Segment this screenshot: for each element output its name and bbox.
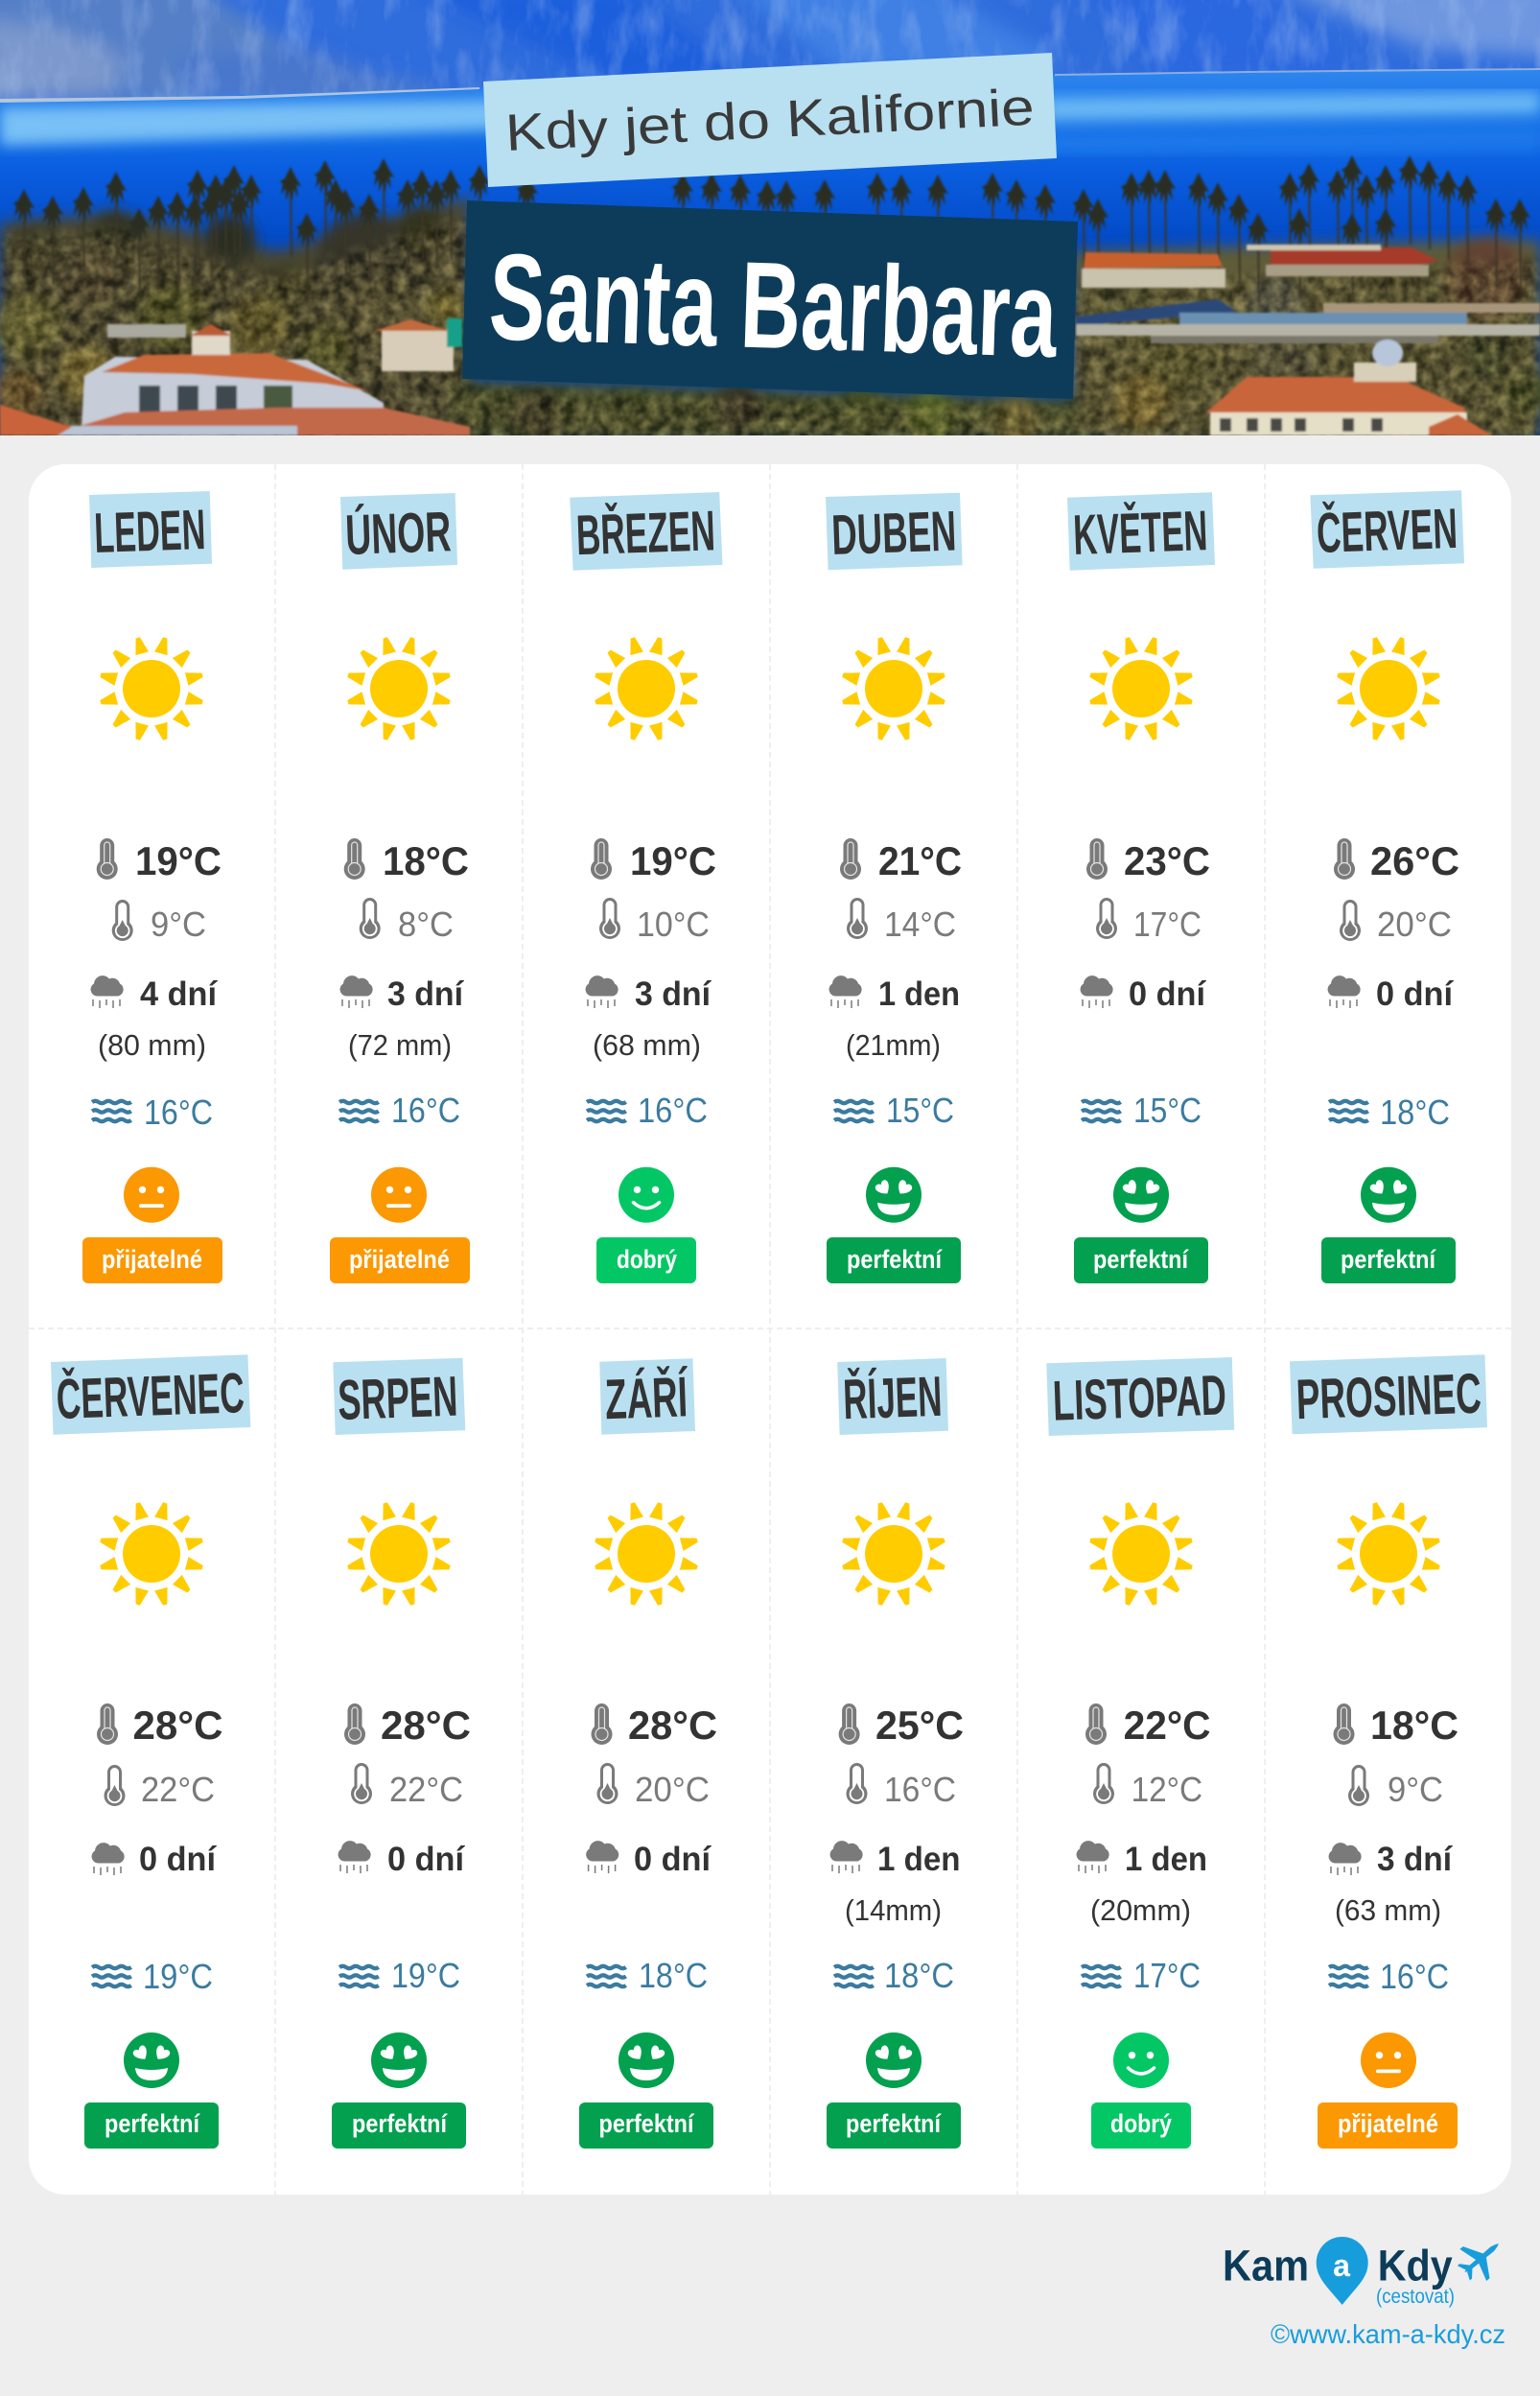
icon: water waves (834, 1966, 874, 1986)
rainfall: (80 mm) (98, 1028, 206, 1062)
rain days: 3 dní (387, 975, 464, 1013)
month label: ŘÍJEN (837, 1358, 948, 1435)
icon: sun (346, 1501, 452, 1607)
rating badge: přijatelné (349, 1245, 450, 1274)
rating badge: přijatelné (1338, 2109, 1438, 2138)
icon: thermometer low (112, 900, 133, 941)
icon: perfect face (866, 2032, 922, 2088)
rating badge (596, 1237, 696, 1283)
icon: water waves (834, 1101, 874, 1121)
month label: BŘEZEN: BŘEZEN (575, 498, 716, 567)
max temperature: 22°C (1124, 1703, 1211, 1748)
icon: perfect face (866, 1167, 922, 1223)
icon: sun (841, 1501, 946, 1607)
icon: thermometer low (1340, 900, 1361, 941)
rain days: 0 dní (1129, 975, 1206, 1013)
icon: sun (346, 636, 452, 741)
icon: perfect face (618, 2032, 674, 2088)
rain days: 0 dní (1376, 975, 1454, 1013)
panel: ŘÍJEN (827, 1358, 964, 2149)
month label: DUBEN (826, 493, 963, 570)
icon: thermometer low (599, 898, 620, 939)
rating badge: perfektní (1341, 1245, 1436, 1274)
rating badge: perfektní (1093, 1245, 1189, 1274)
rating badge: perfektní (847, 1245, 943, 1274)
icon: thermometer low (351, 1763, 372, 1804)
month label: ČERVENEC: ČERVENEC (56, 1360, 245, 1431)
icon: rain cloud (340, 975, 373, 1008)
icon: sun (99, 1501, 204, 1607)
rating badge (332, 2102, 466, 2149)
sea temperature: 18°C (639, 1956, 708, 1995)
rainfall: (21mm) (846, 1028, 941, 1062)
icon: sun (1088, 636, 1194, 741)
rainfall: (68 mm) (593, 1028, 701, 1062)
rain days: 1 den (878, 975, 960, 1013)
min temperature: 9°C (151, 904, 206, 944)
panel: SRPEN (332, 1358, 471, 2149)
month label: ZÁŘÍ: ZÁŘÍ (604, 1364, 689, 1431)
heading tag: Kdy jet do Kalifornie: Kdy jet do Kalifornie (504, 79, 1036, 162)
max temperature: 28°C (628, 1703, 717, 1748)
icon: rain cloud (829, 975, 862, 1008)
icon: thermometer low (847, 898, 868, 939)
icon: water waves (92, 1101, 131, 1121)
website link: ©www.kam-a-kdy.cz (1271, 2319, 1505, 2349)
panel: ÚNOR (330, 493, 470, 1283)
icon: thermometer high (1086, 838, 1108, 880)
rating badge: perfektní (846, 2109, 942, 2138)
month label: ŘÍJEN: ŘÍJEN (842, 1364, 943, 1431)
icon: water waves (1329, 1101, 1368, 1121)
max temperature: 28°C (132, 1703, 222, 1748)
panel: ČERVENEC (51, 1354, 250, 2149)
icon: thermometer low (104, 1765, 125, 1806)
month label: KVĚTEN (1067, 492, 1215, 571)
rating badge: přijatelné (102, 1245, 202, 1274)
icon: thermometer low (1093, 1763, 1114, 1804)
icon: rain cloud (586, 1841, 618, 1873)
max temperature: 19°C (135, 838, 222, 883)
max temperature: 28°C (381, 1703, 471, 1748)
min temperature: 22°C (141, 1770, 215, 1809)
rating badge (827, 1237, 961, 1283)
icon: map pin (1317, 2237, 1368, 2305)
logo word: Kdy: Kdy (1378, 2242, 1453, 2290)
icon: thermometer high (591, 838, 612, 880)
min temperature: 17°C (1133, 904, 1202, 944)
month label: ZÁŘÍ (599, 1358, 695, 1435)
icon: water waves (1082, 1966, 1121, 1986)
min temperature: 10°C (637, 904, 710, 944)
sea temperature: 17°C (1133, 1956, 1201, 1995)
icon: water waves (339, 1101, 379, 1121)
month label: SRPEN: SRPEN (337, 1365, 458, 1432)
icon: thermometer low (1096, 898, 1117, 939)
icon: thermometer high (1333, 1703, 1354, 1745)
icon: good face (618, 1167, 674, 1223)
panel: ZÁŘÍ (579, 1358, 717, 2149)
icon: sun (99, 636, 204, 741)
rating badge: perfektní (352, 2109, 448, 2138)
min temperature: 12°C (1132, 1770, 1202, 1809)
rainfall: (14mm) (845, 1893, 942, 1927)
rating badge (827, 2102, 961, 2149)
min temperature: 8°C (398, 904, 454, 944)
icon: sun (594, 1501, 699, 1607)
sea temperature: 16°C (1380, 1957, 1449, 1996)
icon: thermometer low (360, 898, 381, 939)
icon: water waves (587, 1101, 626, 1121)
min temperature: 20°C (635, 1770, 710, 1809)
sea temperature: 16°C (391, 1091, 460, 1130)
icon: rain cloud (1081, 975, 1113, 1008)
heading tag: Kdy jet do Kalifornie (483, 53, 1057, 187)
sea temperature: 18°C (1380, 1092, 1450, 1132)
icon: thermometer high (839, 1703, 860, 1745)
icon: rain cloud (586, 975, 618, 1008)
rain days: 0 dní (634, 1841, 712, 1878)
icon: thermometer high (840, 838, 861, 880)
icon: thermometer high (591, 1703, 612, 1745)
icon: thermometer low (596, 1763, 618, 1804)
month label: DUBEN: DUBEN (830, 499, 957, 567)
icon: thermometer high (1334, 838, 1355, 880)
max temperature: 19°C (630, 838, 716, 883)
panel: LISTOPAD (1046, 1357, 1234, 2149)
panel: DUBEN (826, 493, 963, 1283)
panel: LEDEN (82, 491, 222, 1283)
month label: LISTOPAD: LISTOPAD (1052, 1363, 1227, 1433)
rain days: 1 den (877, 1841, 961, 1878)
icon: water waves (1082, 1101, 1121, 1121)
icon: neutral face (1361, 2032, 1416, 2088)
rating badge (579, 2102, 713, 2149)
min temperature: 22°C (389, 1770, 463, 1809)
icon: thermometer high (1085, 1703, 1107, 1745)
icon: map pin: a (1333, 2248, 1350, 2283)
icon: water waves (587, 1966, 626, 1986)
sea temperature: 16°C (638, 1091, 708, 1130)
icon: rain cloud (1328, 975, 1361, 1008)
sea temperature: 18°C (884, 1956, 954, 1995)
rain days: 4 dní (140, 975, 218, 1013)
rating badge (330, 1237, 470, 1283)
rain days: 0 dní (139, 1841, 217, 1878)
month label: ÚNOR: ÚNOR (344, 500, 452, 567)
month label: LEDEN: LEDEN (93, 498, 206, 565)
icon: perfect face (371, 2032, 427, 2088)
panel: PROSINEC (1290, 1354, 1487, 2149)
month label: LEDEN (89, 491, 212, 568)
logo tagline: (cestovat) (1376, 2286, 1455, 2308)
rain days: 0 dní (387, 1841, 465, 1878)
panel: KVĚTEN (1067, 492, 1215, 1283)
sea temperature: 15°C (1133, 1091, 1202, 1130)
max temperature: 18°C (383, 838, 469, 883)
min temperature: 14°C (884, 904, 956, 944)
rain days: 1 den (1125, 1841, 1207, 1878)
rainfall: (72 mm) (348, 1028, 452, 1062)
icon: perfect face (1113, 1167, 1169, 1223)
month label: ČERVENEC (51, 1354, 250, 1435)
panel: monthly climate grid (29, 464, 1511, 2195)
min temperature: 9°C (1388, 1770, 1443, 1809)
month label: LISTOPAD (1046, 1357, 1234, 1436)
logo word: Kam: Kam (1223, 2242, 1309, 2290)
icon: rain cloud (830, 1841, 863, 1873)
icon: perfect face (124, 2032, 179, 2088)
rating badge (1321, 1237, 1456, 1283)
month label: ČERVEN (1310, 490, 1464, 569)
icon: sun (594, 636, 699, 741)
rating badge: dobrý (617, 1245, 677, 1274)
rainfall: (20mm) (1090, 1893, 1191, 1927)
rating badge (84, 2102, 219, 2149)
rain days: 3 dní (1377, 1841, 1453, 1878)
icon: rain cloud (91, 975, 124, 1008)
icon: water waves (1329, 1966, 1368, 1986)
rating badge (1074, 1237, 1208, 1283)
icon: thermometer low (846, 1763, 867, 1804)
rating badge (1318, 2102, 1458, 2149)
rating badge: perfektní (105, 2109, 200, 2138)
icon: sun (1336, 636, 1441, 741)
max temperature: 26°C (1370, 838, 1459, 883)
icon: airplane (1450, 2228, 1512, 2289)
icon: neutral face (371, 1167, 427, 1223)
month label: BŘEZEN (570, 492, 723, 571)
icon: thermometer high (97, 838, 118, 880)
sea temperature: 19°C (143, 1957, 213, 1996)
rating badge (82, 1237, 222, 1283)
title: Santa Barbara: Santa Barbara (487, 228, 1060, 384)
title: Santa Barbara (462, 200, 1078, 399)
min temperature: 20°C (1377, 904, 1452, 944)
header photo: Santa Barbara coast (0, 0, 1540, 451)
max temperature: 25°C (875, 1703, 964, 1748)
rating badge: perfektní (598, 2109, 695, 2138)
rainfall: (63 mm) (1335, 1893, 1441, 1927)
icon: rain cloud (1077, 1841, 1109, 1873)
rating badge (1091, 2102, 1191, 2149)
icon: thermometer low (1348, 1765, 1369, 1806)
icon: thermometer high (97, 1703, 118, 1745)
icon: rain cloud (1329, 1843, 1362, 1875)
max temperature: 18°C (1370, 1703, 1458, 1748)
icon: sun (1088, 1501, 1194, 1607)
icon: good face (1113, 2032, 1169, 2088)
month label: SRPEN (333, 1358, 465, 1435)
icon: rain cloud (92, 1843, 125, 1875)
month label: ÚNOR (340, 493, 457, 570)
icon: water waves (339, 1966, 379, 1986)
month label: KVĚTEN: KVĚTEN (1072, 498, 1208, 567)
icon: water waves (92, 1966, 131, 1986)
icon: thermometer high (344, 838, 365, 880)
max temperature: 23°C (1124, 838, 1210, 883)
icon: thermometer high (344, 1703, 365, 1745)
sea temperature: 19°C (391, 1956, 460, 1995)
sea temperature: 15°C (886, 1091, 954, 1130)
min temperature: 16°C (884, 1770, 956, 1809)
panel: ČERVEN (1310, 490, 1464, 1283)
icon: perfect face (1361, 1167, 1416, 1223)
icon: rain cloud (338, 1841, 371, 1873)
max temperature: 21°C (878, 838, 962, 883)
icon: neutral face (124, 1167, 179, 1223)
icon: sun (1336, 1501, 1441, 1607)
rain days: 3 dní (635, 975, 712, 1013)
sea temperature: 16°C (144, 1092, 213, 1132)
rating badge: dobrý (1110, 2109, 1172, 2138)
panel: BŘEZEN (570, 492, 723, 1283)
icon: sun (841, 636, 946, 741)
logo: Kam a Kdy (1223, 2228, 1512, 2308)
